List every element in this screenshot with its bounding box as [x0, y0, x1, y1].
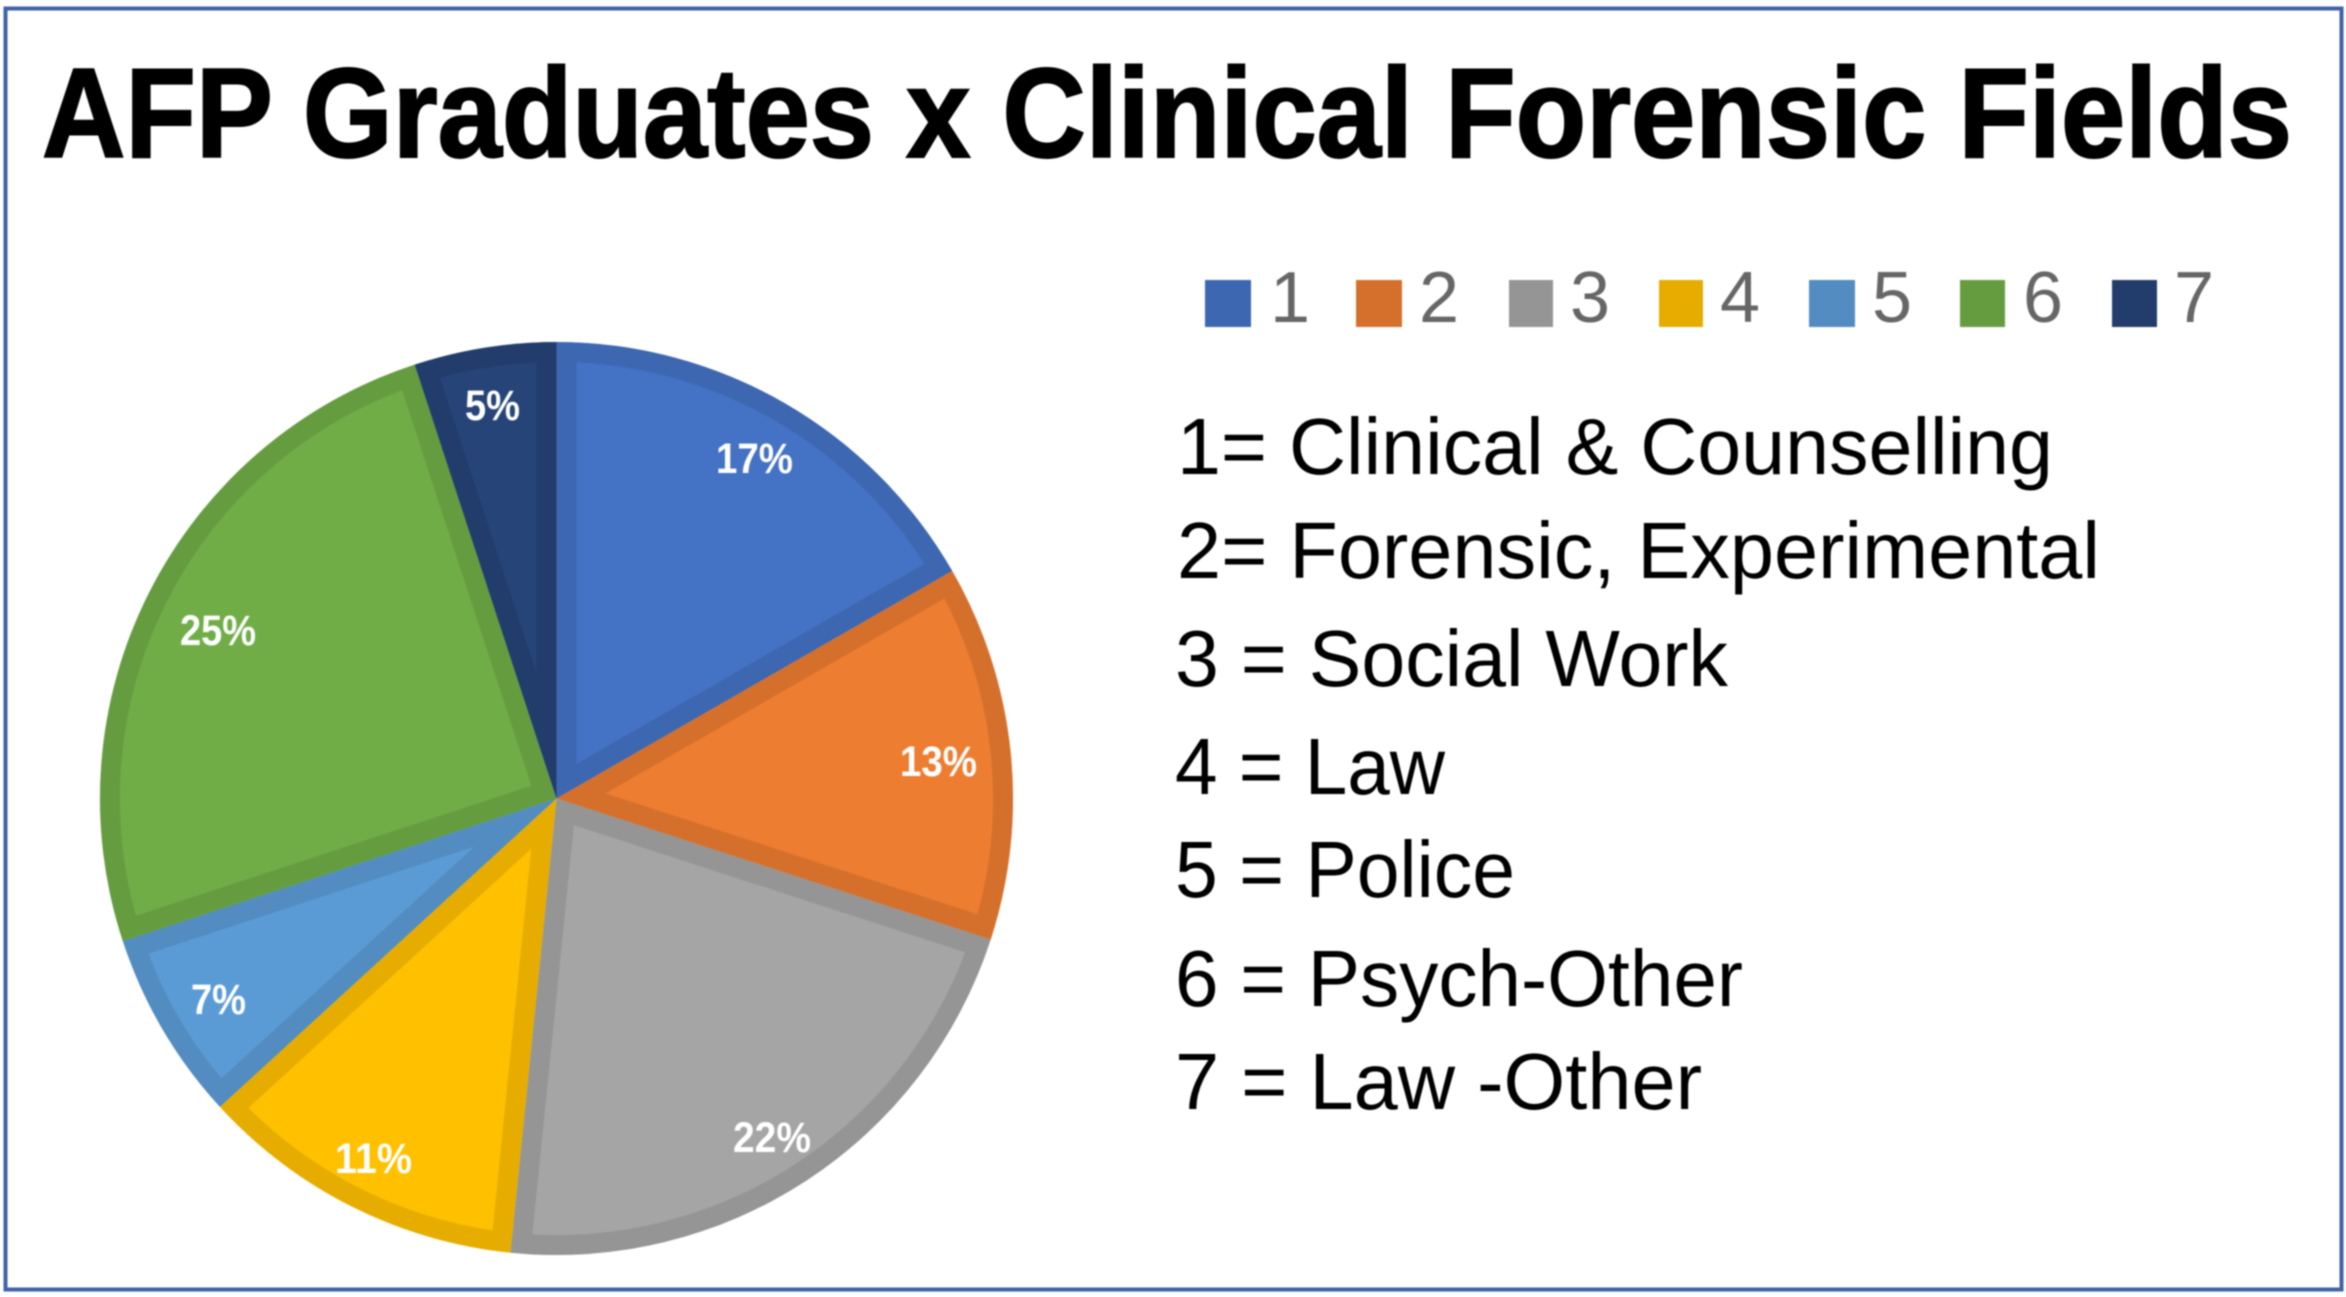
category key: 4 = Law — [1175, 722, 1445, 811]
category key: 1= Clinical & Counselling — [1177, 402, 2053, 491]
chart legend: 1 — [1270, 258, 1310, 338]
category key: 3 = Social Work — [1175, 614, 1729, 703]
percentage labels: 11% — [335, 1135, 412, 1183]
slice 2: 13% — [556, 571, 1013, 940]
slice 3: 22% — [510, 798, 991, 1255]
pie chart — [100, 342, 1013, 1255]
category key — [1175, 402, 2100, 1126]
percentage labels: 17% — [716, 435, 793, 483]
chart legend: 4 — [1720, 258, 1760, 338]
percentage labels: 7% — [191, 976, 246, 1024]
chart legend: 2 — [1419, 258, 1459, 338]
percentage labels: 25% — [180, 607, 256, 655]
percentage labels — [180, 382, 977, 1183]
slice 4: 11% — [220, 798, 556, 1253]
category key: 7 = Law -Other — [1175, 1037, 1702, 1126]
slice 1: 17% — [556, 342, 952, 798]
slice 6: 25% — [100, 365, 557, 941]
percentage labels: 22% — [733, 1114, 811, 1162]
percentage labels: 13% — [900, 738, 977, 786]
chart legend: 7 — [2174, 258, 2214, 338]
category key: 2= Forensic, Experimental — [1177, 506, 2100, 595]
chart legend — [1205, 258, 2214, 338]
category key: 6 = Psych-Other — [1175, 934, 1743, 1023]
category key: 5 = Police — [1175, 825, 1515, 914]
chart legend: 5 — [1872, 258, 1912, 338]
chart legend: 3 — [1570, 258, 1610, 338]
slice 7: 5% — [415, 342, 556, 798]
percentage labels: 5% — [465, 382, 520, 430]
chart legend: 6 — [2023, 258, 2063, 338]
slice 5: 7% — [123, 798, 557, 1107]
